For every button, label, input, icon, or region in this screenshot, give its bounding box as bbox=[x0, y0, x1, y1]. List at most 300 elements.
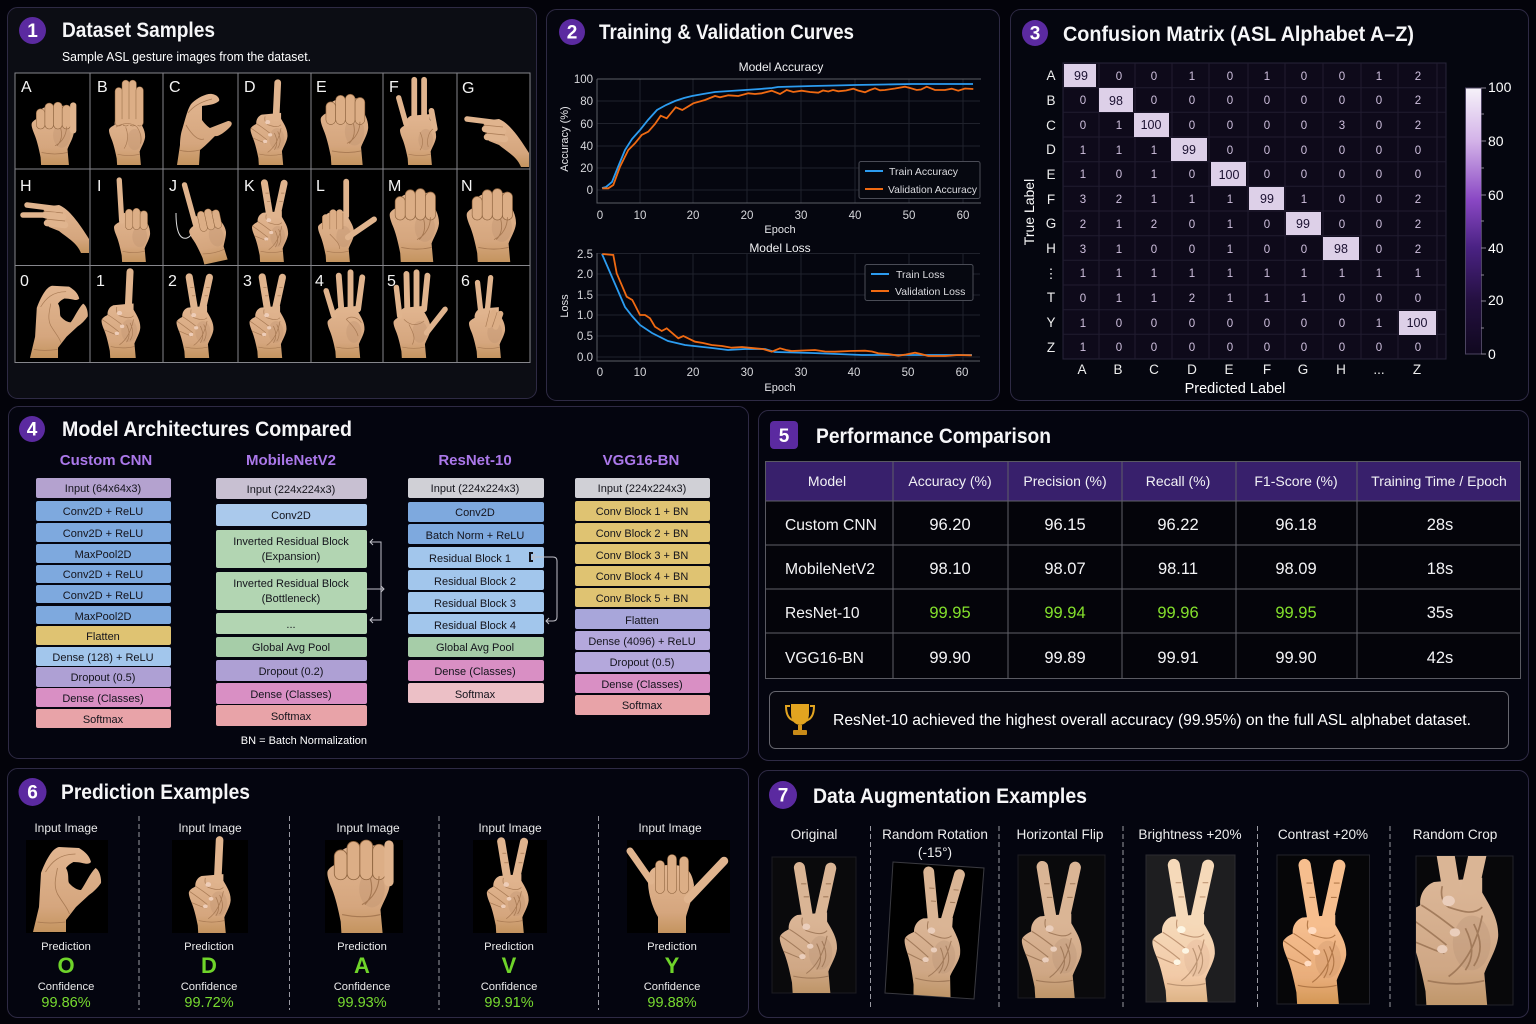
heading: performance comparison: Performance Comparison bbox=[816, 424, 1051, 448]
prediction: D: Prediction bbox=[184, 941, 234, 953]
column: Custom CNN: Softmax bbox=[83, 714, 124, 726]
prediction: Y: Y bbox=[665, 953, 680, 978]
column: VGG16-BN: Softmax bbox=[622, 700, 663, 712]
row D values: 0 bbox=[1376, 145, 1382, 157]
row T values: 2 bbox=[1189, 293, 1195, 305]
prediction: A: Input Image bbox=[336, 821, 400, 835]
row labels: T bbox=[1047, 290, 1055, 305]
heatmap bbox=[1063, 63, 1446, 359]
sample image grid bbox=[15, 73, 530, 362]
x axis ticks: 60 bbox=[957, 210, 969, 222]
legend: loss: Validation Loss bbox=[895, 286, 965, 298]
row D values bbox=[1080, 143, 1421, 157]
heading: confusion matrix: Confusion Matrix (ASL Alphabet A–Z) bbox=[1063, 22, 1414, 46]
gesture I bbox=[97, 178, 150, 262]
row labels: E bbox=[1046, 167, 1056, 182]
panel: model architectures bbox=[8, 406, 748, 758]
prediction: V: 99.91% bbox=[484, 995, 534, 1011]
gesture 4 bbox=[315, 272, 364, 358]
augmentation: original: Original bbox=[791, 827, 837, 842]
row Y values: 0 bbox=[1227, 318, 1233, 330]
gesture A: A bbox=[21, 79, 32, 96]
badge 1 bbox=[19, 17, 46, 44]
x axis ticks bbox=[597, 367, 968, 379]
y axis ticks: 0 bbox=[587, 185, 593, 197]
row D values: 0 bbox=[1339, 145, 1345, 157]
row T values: 1 bbox=[1116, 293, 1122, 305]
augmentation: random crop: Random Crop bbox=[1413, 827, 1497, 842]
gesture H: H bbox=[20, 178, 32, 195]
column: MobileNetV2: Inverted Residual Block bbox=[233, 536, 349, 548]
prediction: Y: Prediction bbox=[647, 941, 697, 953]
gesture B: B bbox=[97, 79, 108, 96]
column: ResNet-10 bbox=[408, 452, 557, 703]
row D values: 1 bbox=[1116, 145, 1122, 157]
validation loss line bbox=[602, 254, 972, 356]
row: ResNet-10: 99.95 bbox=[929, 604, 971, 622]
chart: model accuracy bbox=[559, 60, 981, 236]
column: VGG16-BN: Input (224x224x3) bbox=[598, 483, 686, 495]
column: MobileNetV2: MobileNetV2 bbox=[246, 452, 336, 469]
badge 3: 3 bbox=[1030, 24, 1040, 44]
row A values bbox=[1074, 69, 1421, 83]
gesture I: I bbox=[97, 178, 101, 195]
gesture C: C bbox=[169, 79, 181, 96]
y axis label: Accuracy (%) bbox=[559, 106, 571, 172]
row T values: 0 bbox=[1376, 293, 1382, 305]
gesture E: E bbox=[316, 79, 327, 96]
gesture N: N bbox=[461, 178, 473, 195]
y axis ticks: 0.5 bbox=[577, 331, 593, 343]
chart title: Model Loss bbox=[749, 241, 811, 255]
prediction: Y bbox=[627, 821, 730, 1011]
row G values: 0 bbox=[1376, 219, 1382, 231]
augmentation: horizontal flip bbox=[1017, 827, 1105, 998]
column: MobileNetV2: Global Avg Pool bbox=[252, 642, 330, 654]
chart: model loss bbox=[559, 241, 980, 394]
validation accuracy line bbox=[602, 87, 973, 188]
y axis ticks bbox=[577, 249, 593, 364]
column: VGG16-BN: Conv Block 2 + BN bbox=[596, 528, 688, 540]
row: VGG16-BN: VGG16-BN bbox=[785, 650, 864, 667]
table header: Training Time / Epoch bbox=[1371, 473, 1507, 489]
row: ResNet-10: ResNet-10 bbox=[785, 605, 860, 622]
row A values: 0 bbox=[1151, 71, 1157, 83]
arrow: inverted residual skip bbox=[367, 539, 384, 623]
panel: prediction examples bbox=[8, 768, 748, 1018]
y axis label: Loss bbox=[559, 294, 571, 318]
column: MobileNetV2: Inverted Residual Block bbox=[233, 578, 349, 590]
augmentation: original bbox=[772, 827, 856, 993]
x axis ticks bbox=[597, 210, 969, 222]
prediction: V bbox=[473, 821, 547, 1011]
row H values: 1 bbox=[1116, 244, 1122, 256]
note: batch normalization: BN = Batch Normalization bbox=[241, 735, 367, 747]
column: ResNet-10: Residual Block 3 bbox=[434, 598, 516, 610]
gesture 1: 1 bbox=[96, 273, 105, 290]
gesture H bbox=[20, 178, 89, 253]
row labels bbox=[1044, 68, 1058, 355]
row Z values: 0 bbox=[1415, 342, 1421, 354]
colorbar labels: 100 bbox=[1488, 79, 1512, 95]
row T values bbox=[1080, 293, 1421, 305]
gesture 2 bbox=[168, 273, 213, 358]
row ellipsis values: 1 bbox=[1151, 268, 1157, 280]
y axis ticks: 20 bbox=[580, 163, 593, 175]
row: MobileNetV2: MobileNetV2 bbox=[785, 561, 875, 578]
gesture 3: 3 bbox=[243, 273, 252, 290]
x axis ticks: 30 bbox=[795, 367, 807, 379]
row Z values: 1 bbox=[1080, 342, 1086, 354]
column: ResNet-10: Softmax bbox=[455, 689, 496, 701]
gesture 6: 6 bbox=[461, 273, 470, 290]
column: VGG16-BN: Conv Block 3 + BN bbox=[596, 550, 688, 562]
row H values: 98 bbox=[1334, 242, 1348, 256]
row: MobileNetV2 bbox=[785, 560, 1453, 578]
row: MobileNetV2: 98.07 bbox=[1044, 560, 1086, 578]
gesture J bbox=[169, 178, 232, 266]
badge 2: 2 bbox=[567, 22, 577, 44]
heading: curves: Training & Validation Curves bbox=[599, 20, 854, 44]
column: VGG16-BN: Conv Block 4 + BN bbox=[596, 571, 688, 583]
row E values: 0 bbox=[1116, 169, 1122, 181]
column: MobileNetV2: (Bottleneck) bbox=[262, 593, 320, 605]
prediction: Y: Confidence bbox=[644, 981, 700, 993]
x axis label: Epoch bbox=[764, 224, 796, 236]
row H values: 3 bbox=[1080, 244, 1086, 256]
gesture 1 bbox=[96, 272, 140, 358]
prediction: A: Prediction bbox=[337, 941, 387, 953]
row E values: 0 bbox=[1301, 169, 1307, 181]
row ellipsis values: 1 bbox=[1189, 268, 1195, 280]
gesture 0: 0 bbox=[20, 273, 29, 290]
legend: loss bbox=[865, 264, 973, 300]
prediction: A bbox=[325, 821, 403, 1011]
column labels: F bbox=[1263, 362, 1271, 377]
column: ResNet-10: ResNet-10 bbox=[438, 452, 512, 469]
row E values: 0 bbox=[1415, 169, 1421, 181]
badge 3 bbox=[1022, 20, 1048, 46]
row labels: Y bbox=[1046, 315, 1056, 330]
column labels: ... bbox=[1373, 362, 1385, 377]
gesture G bbox=[462, 80, 529, 167]
row B values: 2 bbox=[1415, 95, 1421, 107]
badge 7 bbox=[769, 781, 797, 809]
column: VGG16-BN: Dense (Classes) bbox=[601, 679, 683, 691]
gesture D bbox=[244, 79, 287, 165]
column: Custom CNN: Conv2D + ReLU bbox=[63, 590, 143, 602]
column: MobileNetV2: (Expansion) bbox=[262, 551, 320, 563]
gesture 4: 4 bbox=[315, 273, 324, 290]
panel: dataset samples bbox=[8, 8, 536, 398]
column: Custom CNN: MaxPool2D bbox=[75, 549, 131, 561]
column: VGG16-BN: Conv Block 5 + BN bbox=[596, 593, 688, 605]
row A values: 0 bbox=[1227, 71, 1233, 83]
badge 7: 7 bbox=[778, 786, 788, 806]
x axis ticks: 20 bbox=[687, 210, 699, 222]
colorbar labels: 80 bbox=[1488, 133, 1504, 149]
row A values: 1 bbox=[1376, 71, 1382, 83]
row Z values: 0 bbox=[1264, 342, 1270, 354]
row labels: C bbox=[1046, 118, 1056, 133]
row Z values: 0 bbox=[1227, 342, 1233, 354]
row ellipsis values: 1 bbox=[1339, 268, 1345, 280]
y axis ticks: 60 bbox=[580, 119, 593, 131]
train loss line bbox=[602, 254, 972, 355]
column: MobileNetV2: Dropout (0.2) bbox=[259, 666, 323, 678]
prediction: D: Input Image bbox=[178, 821, 242, 835]
row C values: 3 bbox=[1339, 120, 1345, 132]
prediction: D: Confidence bbox=[181, 981, 237, 993]
row B values: 0 bbox=[1339, 95, 1345, 107]
row C values: 0 bbox=[1264, 120, 1270, 132]
gesture 5 bbox=[387, 272, 445, 358]
prediction: V: Prediction bbox=[484, 941, 534, 953]
row: Custom CNN: 96.18 bbox=[1275, 516, 1317, 534]
row A values: 1 bbox=[1264, 71, 1270, 83]
row D values: 1 bbox=[1080, 145, 1086, 157]
row A values: 1 bbox=[1189, 71, 1195, 83]
row T values: 0 bbox=[1339, 293, 1345, 305]
column: ResNet-10: Residual Block 4 bbox=[434, 620, 516, 632]
row F values bbox=[1080, 192, 1421, 206]
row C values: 0 bbox=[1301, 120, 1307, 132]
row C values: 2 bbox=[1415, 120, 1421, 132]
gesture B bbox=[97, 79, 145, 165]
row B values: 0 bbox=[1264, 95, 1270, 107]
augmentation: random rotation bbox=[882, 827, 988, 999]
row Y values: 0 bbox=[1189, 318, 1195, 330]
row B values: 0 bbox=[1080, 95, 1086, 107]
legend: accuracy bbox=[859, 162, 980, 198]
row E values: 100 bbox=[1219, 168, 1239, 182]
row Y values: 100 bbox=[1407, 316, 1427, 330]
row B values: 0 bbox=[1227, 95, 1233, 107]
row H values: 0 bbox=[1376, 244, 1382, 256]
row labels: H bbox=[1046, 241, 1056, 256]
column: Custom CNN: Dense (Classes) bbox=[62, 693, 144, 705]
row: VGG16-BN: 99.89 bbox=[1044, 649, 1086, 667]
table header: Accuracy (%) bbox=[908, 473, 992, 489]
gesture G: G bbox=[462, 80, 474, 97]
arrow: residual skip bbox=[532, 554, 557, 624]
prediction: D bbox=[172, 821, 248, 1011]
x axis ticks: 20 bbox=[687, 367, 699, 379]
row: MobileNetV2: 98.09 bbox=[1275, 560, 1317, 578]
subtitle: Sample ASL gesture images from the dataset. bbox=[62, 50, 311, 64]
y axis ticks: 40 bbox=[580, 141, 593, 153]
row F values: 2 bbox=[1116, 194, 1122, 206]
x axis label: Epoch bbox=[764, 382, 796, 394]
row labels: F bbox=[1047, 192, 1055, 207]
row F values: 1 bbox=[1227, 194, 1233, 206]
colorbar labels: 0 bbox=[1488, 346, 1496, 362]
row G values: 0 bbox=[1189, 219, 1195, 231]
row H values: 1 bbox=[1227, 244, 1233, 256]
gesture L bbox=[316, 178, 374, 262]
row G values: 1 bbox=[1227, 219, 1233, 231]
row F values: 99 bbox=[1260, 192, 1274, 206]
row E values: 0 bbox=[1264, 169, 1270, 181]
heading: prediction examples: Prediction Examples bbox=[61, 780, 250, 804]
panel: data augmentation examples bbox=[758, 770, 1528, 1018]
x axis ticks: 40 bbox=[848, 367, 860, 379]
row Z values: 0 bbox=[1301, 342, 1307, 354]
column: Custom CNN bbox=[36, 452, 171, 728]
row: VGG16-BN: 99.91 bbox=[1157, 649, 1199, 667]
row C values: 0 bbox=[1080, 120, 1086, 132]
colorbar labels: 20 bbox=[1488, 292, 1504, 308]
row C values: 1 bbox=[1116, 120, 1122, 132]
gesture D: D bbox=[244, 79, 256, 96]
row: Custom CNN: 96.22 bbox=[1157, 516, 1199, 534]
gesture C bbox=[169, 79, 232, 165]
row G values: 1 bbox=[1116, 219, 1122, 231]
row C values: 100 bbox=[1141, 118, 1161, 132]
row D values: 1 bbox=[1151, 145, 1157, 157]
y axis ticks bbox=[574, 74, 593, 197]
comparison table bbox=[765, 461, 1521, 679]
row B values: 0 bbox=[1301, 95, 1307, 107]
augmentation: random crop bbox=[1414, 829, 1514, 1006]
row G values: 2 bbox=[1151, 219, 1157, 231]
x axis ticks: 30 bbox=[795, 210, 807, 222]
column: ResNet-10: Dense (Classes) bbox=[434, 666, 516, 678]
row: Custom CNN: 96.20 bbox=[929, 516, 971, 534]
gesture M: M bbox=[388, 178, 401, 195]
row C values: 0 bbox=[1376, 120, 1382, 132]
badge 5: 5 bbox=[779, 426, 790, 447]
gesture E bbox=[316, 79, 368, 165]
prediction: A: Confidence bbox=[334, 981, 390, 993]
row A values: 0 bbox=[1116, 71, 1122, 83]
gesture A bbox=[21, 79, 74, 165]
y axis ticks: 80 bbox=[580, 96, 593, 108]
row: MobileNetV2: 18s bbox=[1427, 560, 1453, 578]
row H values: 0 bbox=[1189, 244, 1195, 256]
gesture N bbox=[461, 178, 516, 262]
column: MobileNetV2 bbox=[216, 452, 384, 747]
x axis ticks: 60 bbox=[956, 367, 968, 379]
train accuracy line bbox=[602, 84, 973, 188]
augmentation: contrast: Contrast +20% bbox=[1278, 827, 1368, 842]
row T values: 0 bbox=[1080, 293, 1086, 305]
badge 4 bbox=[19, 416, 45, 442]
column: ResNet-10: Residual Block 1 bbox=[429, 553, 511, 565]
prediction: D: D bbox=[201, 953, 217, 978]
row Y values: 0 bbox=[1151, 318, 1157, 330]
panel: training and validation curves bbox=[546, 10, 1000, 400]
row: ResNet-10: 99.95 bbox=[1275, 604, 1317, 622]
row: ResNet-10: 35s bbox=[1427, 604, 1453, 622]
row ellipsis values: 1 bbox=[1376, 268, 1382, 280]
row C values: 0 bbox=[1227, 120, 1233, 132]
row ellipsis values: 1 bbox=[1227, 268, 1233, 280]
row H values: 0 bbox=[1151, 244, 1157, 256]
row Y values: 1 bbox=[1376, 318, 1382, 330]
residual block marker bbox=[530, 553, 533, 561]
row B values: 98 bbox=[1109, 94, 1123, 108]
gesture F: F bbox=[389, 79, 399, 96]
gesture K: K bbox=[244, 178, 255, 195]
column: Custom CNN: Flatten bbox=[86, 631, 120, 643]
row B values: 0 bbox=[1376, 95, 1382, 107]
icon: trophy bbox=[786, 704, 814, 735]
row F values: 1 bbox=[1301, 194, 1307, 206]
row labels: D bbox=[1046, 142, 1056, 157]
row: ResNet-10: 99.94 bbox=[1044, 604, 1086, 622]
prediction: O: 99.86% bbox=[41, 995, 91, 1011]
column: Custom CNN: Conv2D + ReLU bbox=[63, 528, 143, 540]
column: MobileNetV2: Softmax bbox=[271, 711, 312, 723]
row T values: 1 bbox=[1227, 293, 1233, 305]
x axis label: Predicted Label bbox=[1185, 381, 1285, 397]
row C values: 0 bbox=[1189, 120, 1195, 132]
heading: model architectures: Model Architectures Compared bbox=[62, 417, 352, 441]
badge 4: 4 bbox=[27, 420, 38, 440]
row D values: 0 bbox=[1415, 145, 1421, 157]
column labels: E bbox=[1224, 362, 1234, 377]
legend: accuracy: Train Accuracy bbox=[889, 166, 959, 178]
prediction: O: Input Image bbox=[34, 821, 98, 835]
row T values: 1 bbox=[1301, 293, 1307, 305]
column labels: D bbox=[1187, 362, 1197, 377]
x axis ticks: 50 bbox=[903, 210, 915, 222]
x axis ticks: 0 bbox=[597, 210, 603, 222]
row: VGG16-BN: 99.90 bbox=[929, 649, 971, 667]
column: VGG16-BN: Dropout (0.5) bbox=[610, 657, 674, 669]
column: MobileNetV2: ... bbox=[286, 619, 296, 631]
column: ResNet-10: Batch Norm + ReLU bbox=[426, 530, 524, 542]
row: MobileNetV2: 98.10 bbox=[929, 560, 971, 578]
prediction: A: 99.93% bbox=[337, 995, 387, 1011]
column: Custom CNN: Custom CNN bbox=[60, 452, 152, 469]
row H values: 0 bbox=[1301, 244, 1307, 256]
row E values: 0 bbox=[1189, 169, 1195, 181]
row B values: 0 bbox=[1151, 95, 1157, 107]
badge 6 bbox=[18, 778, 46, 806]
gesture 0 bbox=[20, 273, 88, 358]
row labels: A bbox=[1046, 68, 1056, 83]
row G values: 99 bbox=[1296, 217, 1310, 231]
heading: data augmentation: Data Augmentation Examples bbox=[813, 784, 1087, 808]
column labels: A bbox=[1077, 362, 1087, 377]
column: MobileNetV2: Conv2D bbox=[271, 510, 311, 522]
column: Custom CNN: MaxPool2D bbox=[75, 611, 131, 623]
row ellipsis values: 1 bbox=[1080, 268, 1086, 280]
row: ResNet-10 bbox=[785, 604, 1453, 622]
row T values: 0 bbox=[1415, 293, 1421, 305]
column: MobileNetV2: Dense (Classes) bbox=[250, 689, 332, 701]
x axis ticks: 50 bbox=[902, 367, 914, 379]
table header: Recall (%) bbox=[1146, 473, 1210, 489]
callout: best model bbox=[770, 692, 1508, 748]
row ellipsis values: 1 bbox=[1415, 268, 1421, 280]
x axis ticks: 20 bbox=[741, 210, 753, 222]
row H values: 0 bbox=[1264, 244, 1270, 256]
row Z values: 0 bbox=[1151, 342, 1157, 354]
prediction: A: A bbox=[354, 953, 370, 978]
row Y values: 0 bbox=[1264, 318, 1270, 330]
row H values bbox=[1080, 242, 1421, 256]
row Z values: 0 bbox=[1116, 342, 1122, 354]
badge 2 bbox=[559, 19, 585, 45]
row: VGG16-BN bbox=[785, 649, 1453, 667]
gesture L: L bbox=[316, 178, 325, 195]
row H values: 2 bbox=[1415, 244, 1421, 256]
column: VGG16-BN: VGG16-BN bbox=[603, 452, 679, 469]
column: Custom CNN: Conv2D + ReLU bbox=[63, 506, 143, 518]
